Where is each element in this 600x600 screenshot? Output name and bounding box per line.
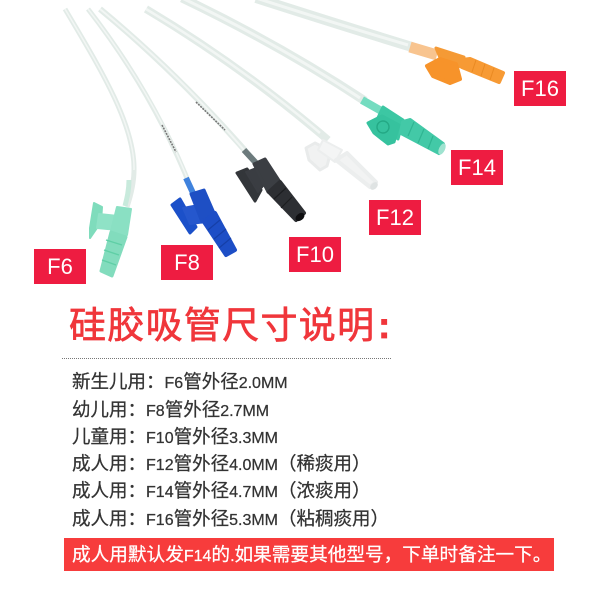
label F16 (514, 71, 566, 106)
label F14: F14 (458, 155, 496, 180)
spec line F14: 成人用：F14管外径4.7MM（浓痰用） (72, 480, 371, 501)
label F8 (161, 245, 213, 280)
spec line F6: 新生儿用：F6管外径2.0MM (72, 371, 288, 392)
label F6 (34, 249, 86, 284)
tube and connector F12 (146, 9, 379, 191)
label F12 (369, 200, 421, 235)
spec line F8: 幼儿用：F8管外径2.7MM (72, 399, 269, 420)
label F10 (289, 237, 341, 272)
tube and connector F6 (65, 9, 134, 276)
label F10: F10 (296, 242, 334, 267)
label F6: F6 (47, 254, 73, 279)
tube and connector F8 (88, 9, 235, 255)
notice bar: 成人用默认发F14的.如果需要其他型号，下单时备注一下。 (72, 544, 551, 565)
tube and connector F14 (182, 0, 447, 156)
tube and connector F10 (100, 9, 306, 223)
label F16: F16 (521, 76, 559, 101)
spec line F10: 儿童用：F10管外径3.3MM (72, 426, 278, 447)
label F12: F12 (376, 205, 414, 230)
label F14 (451, 150, 503, 185)
notice bar (64, 538, 554, 571)
product photo: six suction tubes with connectors (63, 0, 506, 278)
label F8: F8 (174, 250, 200, 275)
text: : (378, 305, 392, 346)
tube and connector F16 (256, 0, 503, 83)
spec line F16: 成人用：F16管外径5.3MM（粘稠痰用） (72, 508, 389, 529)
title: 硅胶吸管尺寸说明 (69, 305, 375, 346)
spec line F12: 成人用：F12管外径4.0MM（稀痰用） (72, 453, 371, 474)
